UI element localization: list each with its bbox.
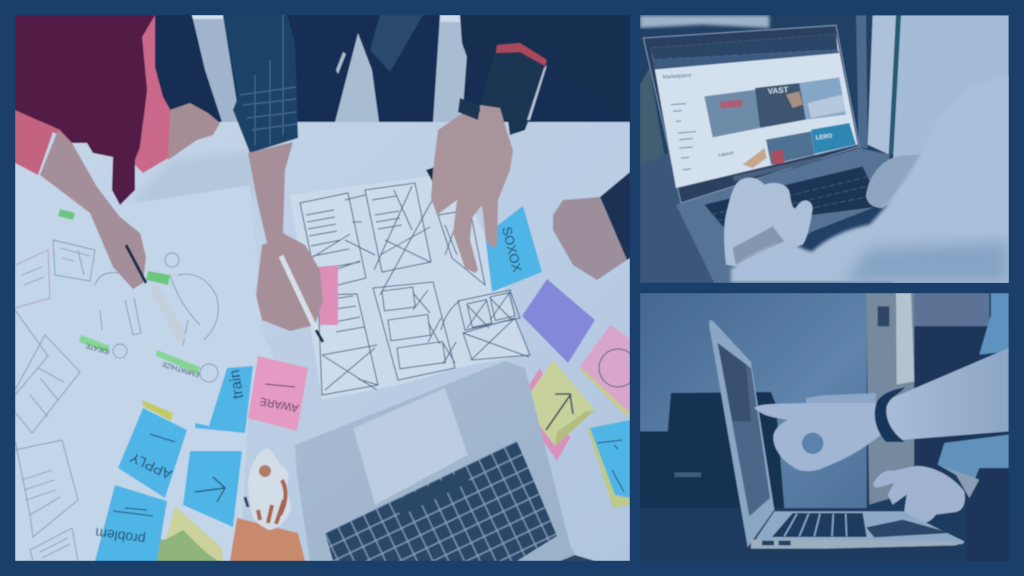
sticky note: yellow with arrow [523,360,595,446]
person: pink shirt left panel [15,110,72,175]
trackpad area [866,520,951,537]
sticky note: blue APPLY: APPLY [127,449,174,483]
sticky note: pink AWARE: AWARE [258,395,300,414]
panel: team sketching wireframes on a table [15,15,637,561]
pointing hand [754,393,881,471]
lower hand on trackpad [873,466,979,523]
blue shirt [938,293,1009,485]
panel: laptop browsing website templates [640,15,1009,283]
green highlighter labels [58,209,201,378]
right hand on keyboard [866,155,923,208]
person: hand at right edge [553,172,630,280]
yellow slip [142,400,173,421]
sticky note: blue XOXO [485,206,542,292]
sticky note: purple [522,279,595,363]
sticky note: blue problem: problem [94,525,146,548]
blurred sleeve in foreground [731,75,1009,283]
keyboard [325,441,557,561]
laptop screen with website: Launch [718,150,734,157]
dark background behind the people [15,15,630,122]
person: centre hands with watch [431,98,513,273]
wireframe sketches left [15,240,218,561]
laptop screen with website [651,34,858,188]
sticky note: pink AWARE [248,356,308,431]
room background [640,293,1009,561]
person: forearm and hand with white marker [248,142,323,342]
laptop screen with website: Marketplace [662,73,692,81]
sticky note: blue with yellow edge [587,420,630,508]
person: arm with marker [40,130,146,289]
green highlighter labels: IDEATE [84,341,111,355]
laptop [709,320,964,549]
wristband [875,387,905,442]
template thumbnails: LERO [815,133,833,142]
sticky note: orange [230,518,305,561]
wireframe sketches centre [290,172,530,400]
sticky note: blue train [195,366,253,433]
lid [709,320,774,547]
dark chair [640,392,784,508]
dock [733,156,822,181]
sticky note: blue arrow [183,451,242,527]
sticky note: pink with yellow edge [580,325,630,418]
laptop base and keyboard [676,148,889,283]
template thumbnails [704,77,856,168]
person: pink shirt strip [133,15,172,173]
laptop cable shadow [560,555,595,561]
laptop lid [643,25,859,203]
hand on keyboard with watch [724,178,813,266]
sticky note: blue train: train [226,369,247,400]
front edge with ports [751,540,964,549]
screen [718,343,770,516]
foreground lower shading [843,241,1009,283]
person: hand resting on table [168,103,220,160]
table surface [15,121,630,561]
template thumbnails: VAST [767,85,789,96]
forearm [884,348,1009,441]
sticky note: pink underlay [528,368,570,461]
sticky note: pink beside hand [316,265,338,325]
person: plaid sleeve [223,15,298,153]
sticky note: blue APPLY [118,408,187,498]
marker on paper [150,284,187,342]
person: maroon vest [15,15,155,205]
green highlighter labels: EMPATHIZE [161,360,201,378]
person: marker in centre hand [426,167,434,182]
trackpad [353,388,468,505]
room background [640,15,1009,283]
laptop on table [295,361,578,561]
sticky note: blue problem [94,485,167,561]
panel: pointing at a laptop screen [640,293,1009,561]
keyboard [772,513,867,537]
sticker: astronaut [245,448,291,530]
sticky note: yellow with green drawing [156,506,224,561]
person: black sleeve with red stripe [460,15,630,135]
sticky note: blue XOXO: SOXOX [499,225,525,274]
base [751,511,964,549]
